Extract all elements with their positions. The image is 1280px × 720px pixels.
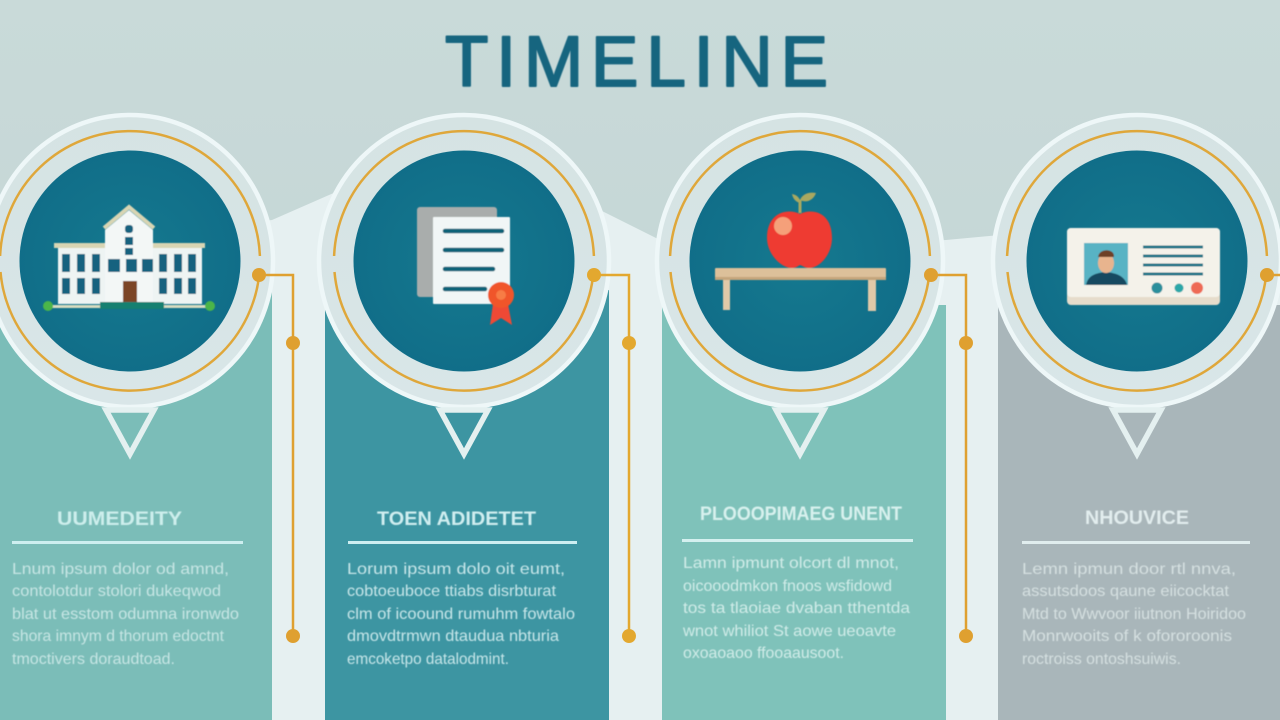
panel: column 2 certificate [319,115,636,720]
body text: roctroiss ontoshsuiwis. [1022,651,1181,668]
divider rule [1022,541,1250,544]
body text: tmoctivers doraudtoad. [12,651,175,668]
body text: emcoketpo datalodmint. [347,651,509,668]
pointer triangle [106,410,154,454]
body text [347,561,575,668]
body text: cobtoeuboce ttiabs disrbturat [347,583,557,600]
heading: TOEN ADIDETET [377,509,536,530]
body text: Mtd to Wwvoor iiutnon Hoiridoo [1022,606,1246,623]
marker circle [0,115,273,407]
icon: certificate document [417,207,514,325]
body text: Lamn ipmunt olcort dl mnot, [683,555,899,572]
pointer triangle [440,410,488,454]
panel background [0,290,272,720]
connector [252,268,300,643]
body text: Lorum ipsum dolo oit eumt, [347,561,565,578]
heading: UUMEDEITY [57,509,182,530]
marker circle [319,115,609,407]
panel: column 3 apple on shelf [657,115,973,720]
heading: NHOUVICE [1085,508,1189,529]
body text: blat ut esstom odumna ironwdo [12,606,239,623]
panel background [998,305,1280,720]
connector [587,268,636,643]
body text: oicooodmkon fnoos wsfidowd [683,578,892,595]
body text [682,555,910,662]
body text: dmovdtrmwn dtaudua nbturia [347,628,559,645]
body text: Lemn ipmun door rtl nnva, [1022,561,1236,578]
body text: clm of icoound rumuhm fowtalo [347,606,575,623]
panel background [662,305,946,720]
heading: PLOOOPIMAEG UNENT [700,504,902,525]
body text: contolotdur stolori dukeqwod [12,583,221,600]
panel: column 1 university [0,115,300,720]
icon: id card [1067,228,1220,305]
divider rule [348,541,577,544]
connector [924,268,973,643]
body text: oxoaoaoo ffooaausoot. [683,645,844,662]
body text [1022,561,1246,668]
icon: apple on shelf [715,193,886,311]
body text: Monrwooits of k ofororoonis [1022,628,1232,645]
body text: assutsdoos qaune eiicocktat [1022,583,1230,600]
marker circle [657,115,943,407]
panel: column 4 id card [993,115,1280,720]
pointer triangle [776,410,824,454]
pointer triangle [1113,410,1161,454]
body text [12,561,239,668]
body text: wnot whiliot St aowe ueoavte [682,623,896,640]
body text: shora imnym d thorum edoctnt [12,628,225,645]
divider rule [12,541,243,544]
divider rule [682,539,913,542]
icon: university building [43,207,215,311]
panel background [325,290,609,720]
marker circle [993,115,1280,407]
body text: Lnum ipsum dolor od amnd, [12,561,229,578]
connector [1260,268,1280,282]
title: TIMELINE [445,23,828,102]
body text: tos ta tlaoiae dvaban tthentda [683,600,910,617]
